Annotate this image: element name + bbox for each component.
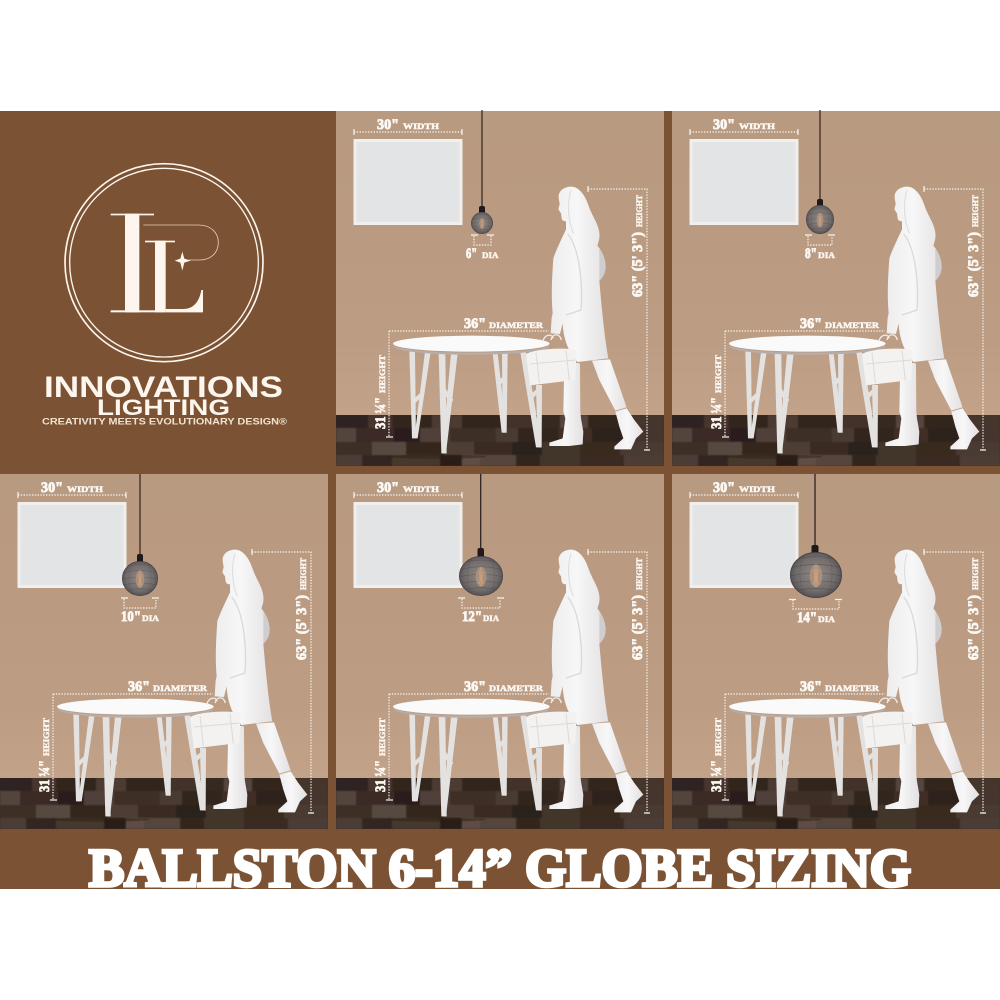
dimension: figure height: [252, 549, 314, 813]
dimension: artwork width: [354, 117, 462, 135]
dimension: lamp diameter: 12": [462, 609, 482, 625]
dimension: table diameter: 36": [800, 316, 822, 332]
dimension: table diameter: 36": [128, 679, 150, 695]
dimension: figure height: HEIGHT: [298, 558, 308, 590]
dimension: table diameter: DIAMETER: [489, 320, 544, 330]
dimension: table diameter: 36": [800, 679, 822, 695]
dimension: figure height: HEIGHT: [634, 195, 644, 227]
dimension: figure height: [588, 186, 650, 450]
dimension: lamp diameter: DIA: [142, 613, 160, 623]
dimension: artwork width: 30": [713, 117, 735, 133]
dimension: figure height: 63" (5' 3"): [294, 595, 310, 660]
pendant lamp 6 inch: [471, 110, 493, 234]
pendant lamp 8 inch: [806, 110, 834, 234]
dimension: artwork width: [690, 117, 798, 135]
dimension: lamp diameter: [466, 235, 499, 262]
dimension: figure height: [924, 549, 986, 813]
pendant lamp 10 inch: [122, 474, 158, 596]
dimension: figure height: HEIGHT: [634, 558, 644, 590]
dimension: table height: 31 ¼": [373, 760, 389, 792]
dimension: table diameter: DIAMETER: [153, 683, 208, 693]
logo emblem rings and monogram: [65, 164, 263, 362]
panel: brand logo: [42, 164, 287, 428]
room scene with artwork, table and figure: [672, 474, 1000, 829]
dimension: figure height: 63" (5' 3"): [966, 232, 982, 297]
dimension: artwork width: [690, 480, 798, 498]
dimension: figure height: 63" (5' 3"): [966, 595, 982, 660]
room scene with artwork, table and figure: [672, 111, 1000, 466]
dimension: table height: HEIGHT: [377, 718, 387, 756]
dimension: artwork width: 30": [377, 480, 399, 496]
dimension: lamp diameter: DIA: [818, 250, 836, 260]
dimension: table diameter: 36": [464, 679, 486, 695]
dimension: artwork width: [18, 480, 126, 498]
dimension: lamp diameter: 14": [797, 610, 817, 626]
room scene with artwork, table and figure: [0, 474, 328, 829]
title banner text: BALLSTON 6-14” GLOBE SIZING: [89, 838, 911, 898]
dimension: figure height: HEIGHT: [970, 195, 980, 227]
dimension: artwork width: 30": [713, 480, 735, 496]
dimension: table height: HEIGHT: [377, 355, 387, 393]
dimension: table diameter: [725, 316, 885, 332]
dimension: table diameter: 36": [464, 316, 486, 332]
room scene with artwork, table and figure: [336, 111, 664, 466]
dimension: lamp diameter: 6": [466, 246, 477, 262]
panel: 6 inch globe: [336, 110, 664, 466]
dimension: lamp diameter: 8": [805, 246, 817, 262]
dimension: figure height: [588, 549, 650, 813]
dimension: table height: 31 ¼": [709, 760, 725, 792]
room scene with artwork, table and figure: [336, 474, 664, 829]
brand name INNOVATIONS: INNOVATIONS: [44, 371, 283, 404]
dimension: table height: HEIGHT: [713, 355, 723, 393]
dimension: lamp diameter: DIA: [818, 614, 836, 624]
brand name LIGHTING: LIGHTING: [97, 395, 230, 420]
dimension: figure height: 63" (5' 3"): [630, 595, 646, 660]
pendant lamp 14 inch: [791, 474, 841, 598]
tagline: CREATIVITY MEETS EVOLUTIONARY DESIGN®: [42, 416, 287, 428]
dimension: artwork width: 30": [377, 117, 399, 133]
panel: 8 inch globe: [672, 110, 1000, 466]
panel: 12 inch globe: [336, 474, 664, 829]
dimension: figure height: HEIGHT: [970, 558, 980, 590]
dimension: table diameter: DIAMETER: [489, 683, 544, 693]
dimension: table diameter: DIAMETER: [825, 320, 880, 330]
dimension: lamp diameter: DIA: [482, 250, 499, 260]
pendant lamp 12 inch: [459, 474, 503, 596]
dimension: table height: [709, 694, 729, 800]
dimension: table diameter: [53, 679, 213, 695]
dimension: table diameter: [389, 316, 549, 332]
dimension: table height: HEIGHT: [713, 718, 723, 756]
dimension: table height: 31 ¼": [709, 397, 725, 429]
dimension: artwork width: WIDTH: [67, 484, 103, 494]
dimension: table height: HEIGHT: [41, 718, 51, 756]
dimension: table height: [373, 694, 393, 800]
dimension: table diameter: [725, 679, 885, 695]
dimension: table height: 31 ¼": [37, 760, 53, 792]
dimension: lamp diameter: 10": [121, 609, 141, 625]
dimension: artwork width: [354, 480, 462, 498]
dimension: lamp diameter: [805, 235, 836, 262]
dimension: artwork width: 30": [41, 480, 63, 496]
dimension: lamp diameter: [789, 600, 842, 626]
dimension: table height: 31 ¼": [373, 397, 389, 429]
dimension: artwork width: WIDTH: [403, 484, 439, 494]
dimension: lamp diameter: DIA: [483, 613, 500, 623]
dimension: table diameter: DIAMETER: [825, 683, 880, 693]
dimension: artwork width: WIDTH: [739, 121, 775, 131]
dimension: lamp diameter: [458, 598, 504, 625]
dimension: table height: [709, 331, 729, 437]
dimension: table diameter: [389, 679, 549, 695]
dimension: lamp diameter: [121, 598, 160, 625]
panel: 10 inch globe: [0, 474, 328, 829]
dimension: artwork width: WIDTH: [739, 484, 775, 494]
dimension: artwork width: WIDTH: [403, 121, 439, 131]
panel: 14 inch globe: [672, 474, 1000, 829]
dimension: table height: [37, 694, 57, 800]
dimension: figure height: [924, 186, 986, 450]
dimension: figure height: 63" (5' 3"): [630, 232, 646, 297]
brown poster backdrop: [0, 111, 1000, 889]
dimension: table height: [373, 331, 393, 437]
